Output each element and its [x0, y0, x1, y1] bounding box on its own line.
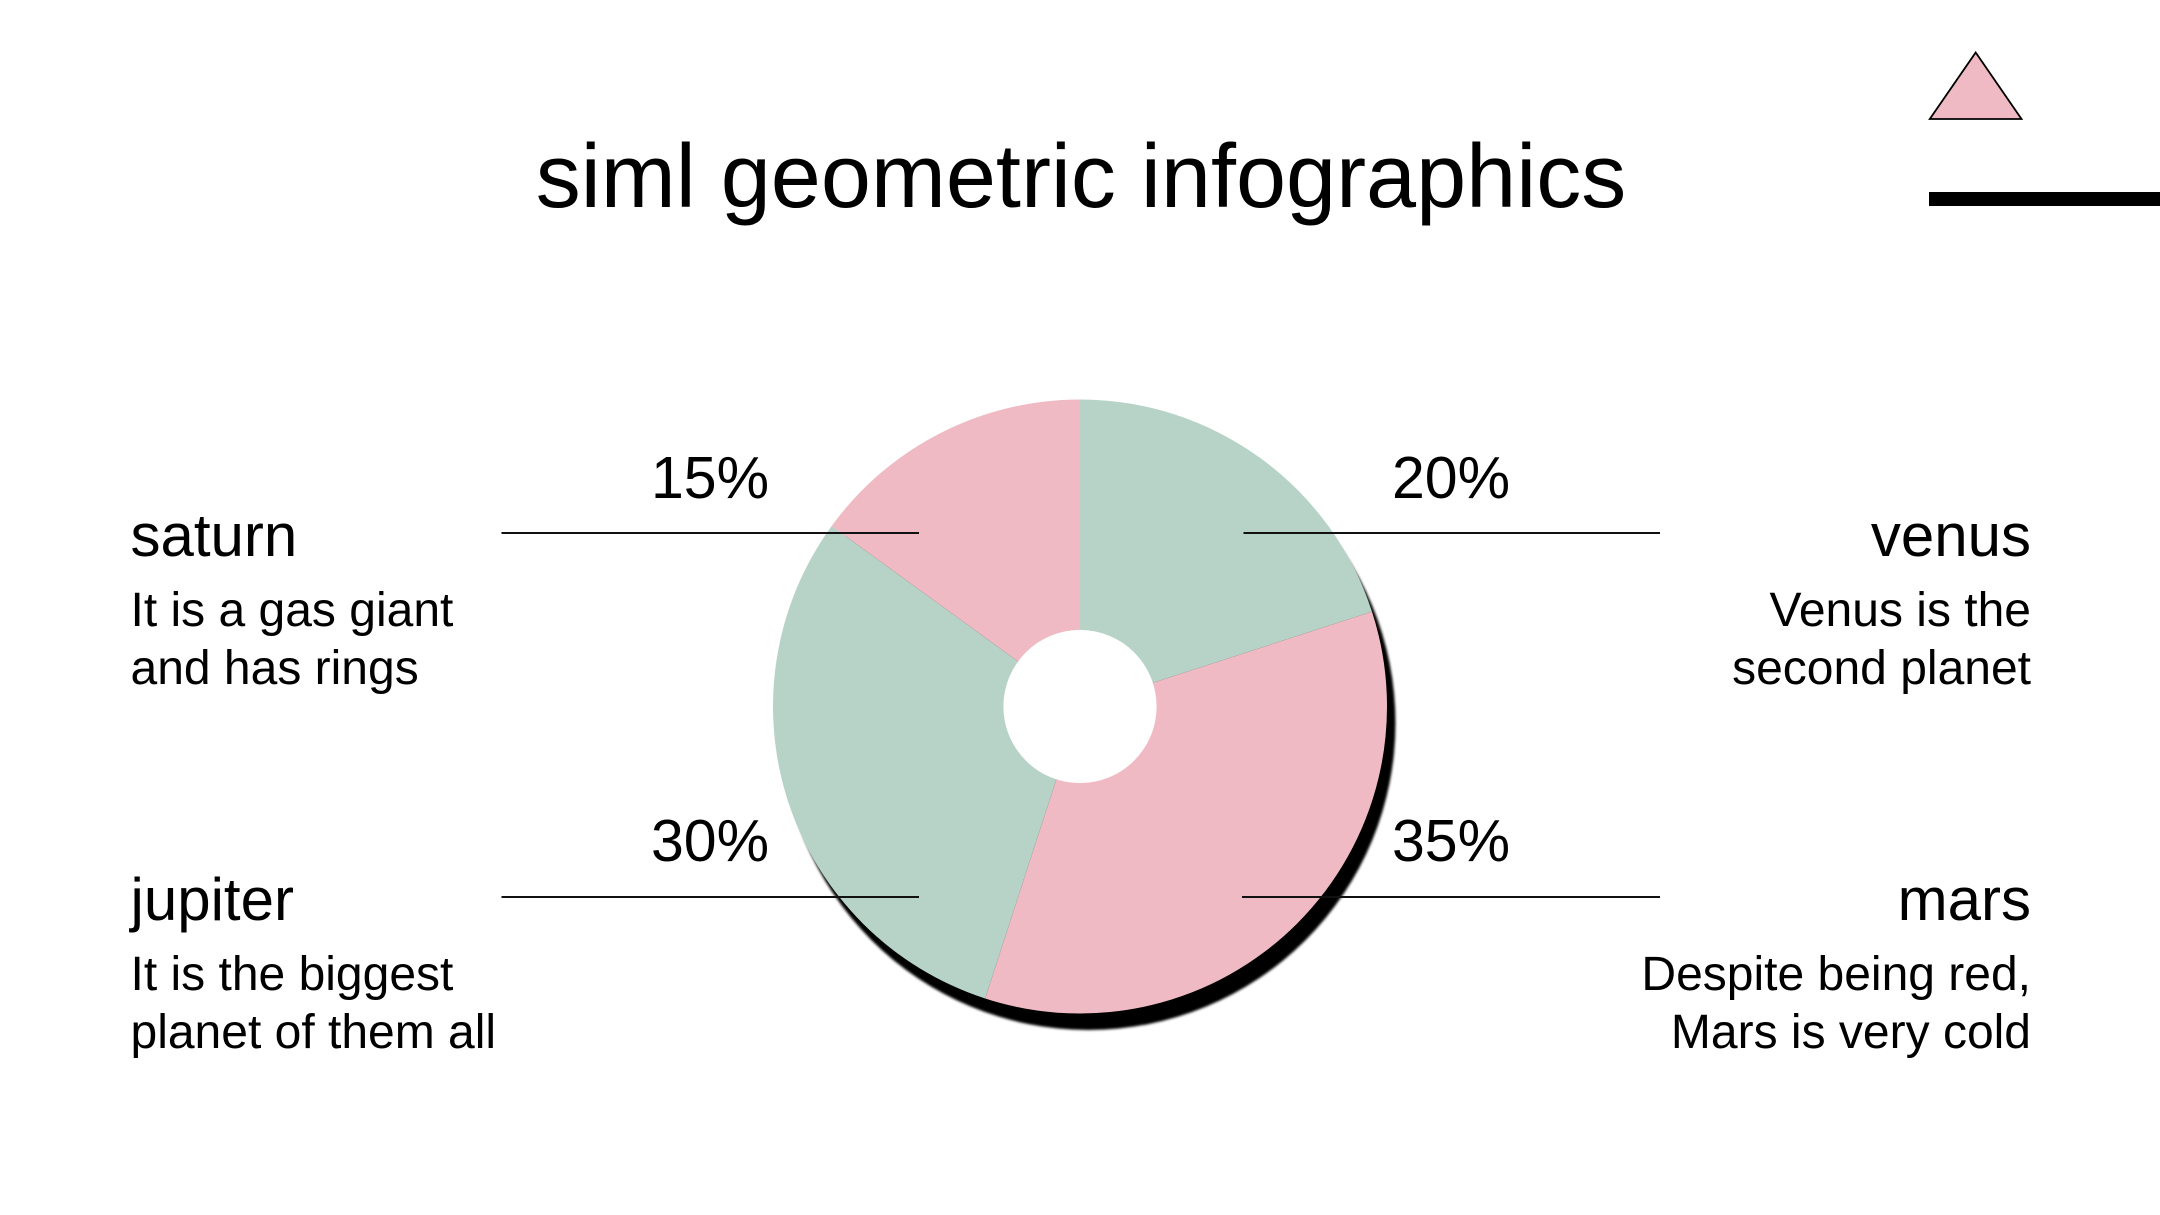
percentage 20%: 20%	[1392, 445, 1510, 511]
slice: mars 35%	[985, 612, 1387, 1013]
leader line	[502, 896, 919, 898]
heading: saturn: saturn	[130, 502, 297, 569]
donut hole	[1003, 630, 1157, 783]
heading: jupiter: jupiter	[128, 866, 294, 933]
title: siml geometric infographics	[536, 127, 1626, 227]
percentage 15%: 15%	[651, 445, 769, 511]
decorative black bar	[1929, 192, 2160, 206]
slice: jupiter 30%	[773, 526, 1080, 998]
description: second planet	[1732, 642, 2031, 695]
description: Venus is the	[1769, 584, 2031, 637]
description: planet of them all	[130, 1006, 496, 1059]
slice: venus 20%	[1080, 400, 1372, 706]
donut chart	[773, 400, 1396, 1030]
callout: venus	[1244, 445, 2031, 695]
callout: jupiter	[128, 808, 919, 1059]
description: It is a gas giant	[130, 584, 453, 637]
percentage 35%: 35%	[1392, 808, 1510, 874]
leader line	[1244, 532, 1660, 534]
heading: mars: mars	[1898, 866, 2031, 933]
description: It is the biggest	[130, 948, 453, 1001]
percentage 30%: 30%	[651, 808, 769, 874]
icon: pink triangle	[1930, 52, 2022, 119]
callout: saturn	[130, 445, 919, 695]
description: Despite being red,	[1641, 948, 2031, 1001]
description: and has rings	[130, 642, 419, 695]
leader line	[502, 532, 919, 534]
callout: mars	[1242, 808, 2031, 1059]
chart shadow	[782, 416, 1396, 1030]
leader line	[1242, 896, 1660, 898]
heading: venus: venus	[1871, 502, 2031, 569]
description: Mars is very cold	[1671, 1006, 2031, 1059]
slice: saturn 15%	[832, 400, 1080, 706]
